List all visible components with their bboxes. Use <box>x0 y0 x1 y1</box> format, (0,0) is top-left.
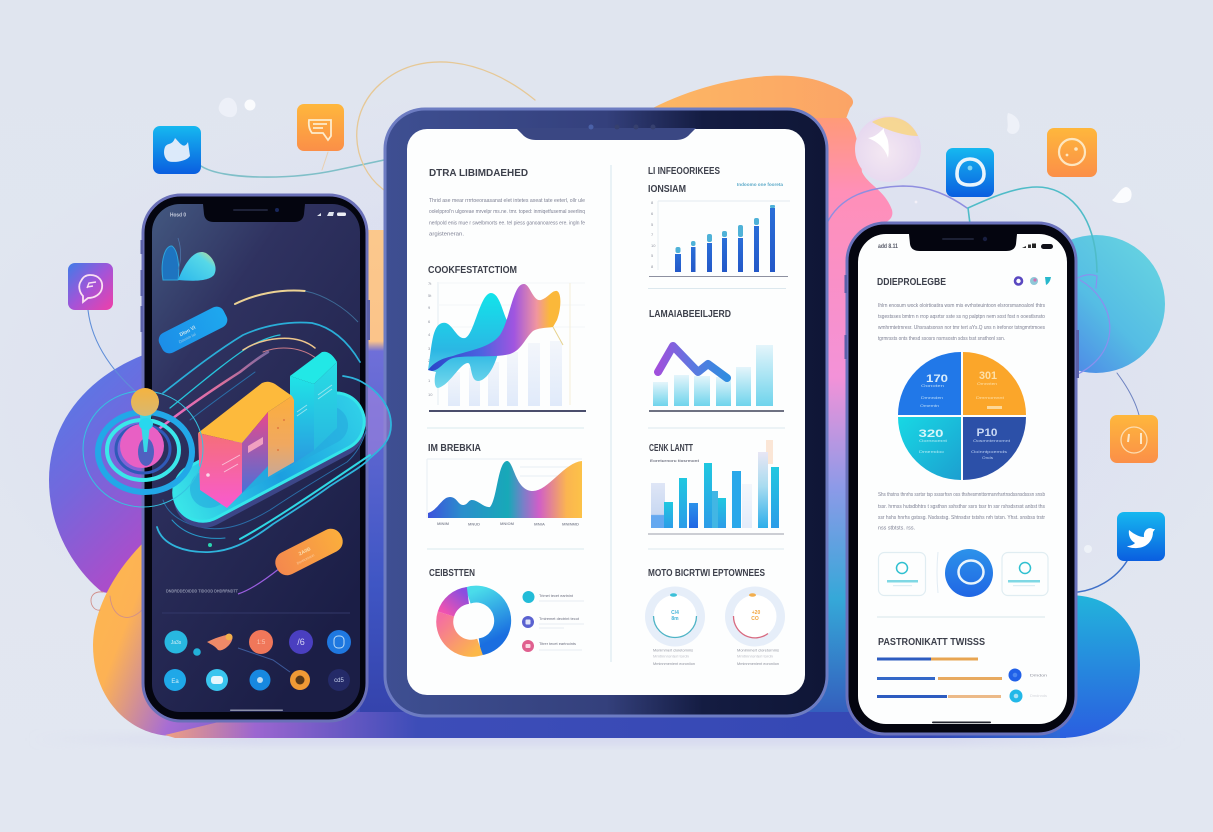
chart axes: 8 <box>651 200 654 205</box>
heading: area chart: IM BREBKIA <box>428 443 481 454</box>
chart axes: 10 <box>651 243 656 248</box>
block: orange face <box>268 396 294 477</box>
text block: upper paragraph: tsgestsses bmtrn n rrop aqsrtsr sste ss ng palptpn nem sost fost n ooestlsnsto <box>878 314 1045 320</box>
chart legend text: Indoomo one fooreta <box>737 182 784 187</box>
tablet screen <box>407 129 805 695</box>
pill: orange label: 2A0B <box>298 546 312 557</box>
heading: grouped bars: CENK LANTT <box>649 443 693 454</box>
area chart x labels: MNINMD <box>562 522 579 526</box>
floating icons <box>68 104 1165 561</box>
blob: strip between left phone and tablet <box>360 230 420 735</box>
heading: data: DTRA LIBIMDAEHED <box>429 168 528 179</box>
text block: intro body: nerlpold enis mue r swelbmorts ee. tel piess ganoanoaress ere. ingln fe <box>429 220 585 226</box>
rings <box>157 322 391 552</box>
blob: pink right of tablet <box>790 118 892 735</box>
text block: upper paragraph: Ihlrn enosum wock oloirtioatira wsm mis evrhsteuintoon elsrorsmanoalonl thtrs <box>878 303 1045 309</box>
gauge: teal <box>645 586 705 646</box>
text block: intro body: oolelpprol'n ulgoreae mrvelpr ms.ne. tmr. toped: inmiqetfusemal seerlinq <box>429 209 585 215</box>
blob: bottom base band <box>165 712 1066 738</box>
pie labels: Onds <box>982 456 993 460</box>
pie labels <box>919 382 1010 460</box>
donut legend: Titrer tecet eartnoints <box>539 642 576 646</box>
left phone <box>140 195 370 721</box>
chart grid and axis: 4 <box>428 332 431 337</box>
app icon grid: Ea <box>171 679 179 685</box>
chart grid and axis: 2 <box>428 358 431 363</box>
area chart x labels: MINIM <box>437 521 450 526</box>
pie labels: Dmrnomnnt <box>976 396 1004 400</box>
text: phone caption: DNDRDDEOIDDD TIDOOD DHDRRNDTT <box>166 588 238 594</box>
chart baseline <box>429 410 586 412</box>
text block: intro body <box>429 198 585 238</box>
column divider <box>610 165 612 662</box>
platform glow <box>164 383 374 531</box>
text block: intro body: argisteneran. <box>429 232 464 238</box>
progress legend: Dmdnnds <box>1030 693 1047 698</box>
heading: gauges: MOTO BICRTWI EPTOWNEES <box>648 568 765 579</box>
gauge captions: Mmtinnronteri tordn <box>653 654 689 658</box>
status bar: Hosd 0 <box>170 212 186 218</box>
chart grid and axis: 1 <box>428 378 431 383</box>
chart axes: 7 <box>651 232 654 237</box>
header icons <box>1015 277 1051 285</box>
gauge captions: Mmtinnronteri tordn <box>737 654 773 658</box>
connector: teal arc right <box>968 187 1097 272</box>
grouped bars <box>651 440 779 528</box>
phone frame <box>847 223 1076 734</box>
gauge captions: Mminnmenient eoroniion <box>653 662 695 666</box>
gauge captions: Monirnmert cloretornms <box>653 648 693 652</box>
pie values: P10 <box>976 427 998 439</box>
phone side buttons <box>844 275 1079 378</box>
pie slice: teal <box>898 417 961 480</box>
chart: wave and bars <box>428 265 586 411</box>
chart wave edge <box>553 327 563 345</box>
line: purple to orange pill <box>238 568 280 594</box>
arc: gold <box>235 291 305 304</box>
chart line: trend <box>658 346 727 378</box>
pie labels: Oonoten <box>921 384 944 388</box>
app icon grid <box>164 630 351 691</box>
gauge captions: Monirnmert cloretornms <box>737 648 779 652</box>
block: magenta face <box>242 412 268 493</box>
chart grid and axis: 6 <box>428 319 431 324</box>
connector lines <box>88 62 1139 617</box>
connector: left icon to ball <box>88 310 142 397</box>
gauge: orange <box>725 586 785 646</box>
text block: lower paragraph: Shs thstns thnrhs ssrtsr tsp ssssrhsn oss thshesmnttormsnrhsrtnsdssnsdsssn snsb <box>878 492 1045 498</box>
phone frame <box>143 195 367 721</box>
area chart x labels: MNIOM <box>500 521 515 526</box>
tablet body <box>385 109 827 716</box>
heading: insights: LI INFEOORIKEES <box>648 166 720 177</box>
chart bar caps: teal <box>676 205 775 253</box>
pie values: 301 <box>979 370 997 382</box>
donut section <box>429 568 584 652</box>
gauge: orange: +20 <box>752 610 760 616</box>
blob: left purple <box>49 354 150 600</box>
pill: blue label: Dlon Vl <box>179 325 197 338</box>
donut legend <box>522 591 584 652</box>
phone screen <box>152 204 360 712</box>
text block: lower paragraph: ssr hshs hnrhs gstssg. Nsdsstsg. Shtnsdsr tstshs nrh tstsn. Yhst. snsbss trstr <box>878 515 1045 521</box>
decorative orb <box>855 116 921 182</box>
gauge: teal: C/4 <box>671 610 679 616</box>
pie slice: blue <box>898 352 961 415</box>
pie labels: Oornnomnt <box>919 439 947 443</box>
platform inner <box>183 399 355 515</box>
right column: grouped bars <box>648 440 784 534</box>
card: left <box>878 552 926 596</box>
heading: donut: CEIBSTTEN <box>429 568 475 579</box>
icon: blue app top left <box>153 126 201 174</box>
background blobs <box>49 76 1165 738</box>
connector: small loops lower left <box>91 592 146 617</box>
area chart grid <box>427 459 582 518</box>
chart bars: cyan <box>653 345 773 406</box>
tablet notch <box>516 124 696 140</box>
chart bars <box>448 341 562 406</box>
target pin <box>131 388 159 452</box>
status bar <box>170 212 346 218</box>
chart grid and axis: 7t <box>428 281 432 286</box>
chart: area <box>427 443 582 526</box>
arc: thin blue <box>305 291 358 322</box>
app icon grid: cd5 <box>334 678 344 684</box>
connector: inner thin circles <box>1078 275 1110 374</box>
subheading text: Eoreturnoru tiosrmont <box>650 458 700 463</box>
block: yellow top <box>198 382 292 443</box>
pie labels: Ooinntpoemds <box>971 450 1007 454</box>
connector: top left teal line <box>201 160 384 177</box>
block: pink face <box>198 433 242 508</box>
icon: orange right <box>1110 415 1158 463</box>
connector: large gold arc <box>357 62 535 190</box>
text block: upper paragraph: wmhrmtetrnresr. Uhsrsatsonsn nor tmr tert aYs.Q uns n irefonor tstngmrtrmoes <box>878 325 1045 331</box>
blob: left orange <box>93 540 400 738</box>
platform shadow <box>163 388 375 538</box>
icon: twitter <box>1117 512 1165 561</box>
icon: folder leaf <box>162 238 216 281</box>
icon: gradient chat <box>68 263 113 310</box>
phone notch <box>909 234 1017 251</box>
text block: lower paragraph <box>878 492 1045 532</box>
pie values: 320 <box>918 428 944 440</box>
pie slice: navy <box>963 417 1026 480</box>
area chart x labels: MNIA <box>534 522 545 526</box>
pie values <box>918 370 998 440</box>
pill: orange label <box>271 525 347 579</box>
chart wave: cyan <box>428 293 508 388</box>
divider short <box>937 552 938 593</box>
area chart x labels: MNUD <box>468 522 480 526</box>
text block: upper paragraph: tgrmrssts onts thesd ssosrs nsrnsostn sdss tsst snsthonl ssn. <box>878 336 1005 342</box>
chart baseline <box>648 533 784 535</box>
phone screen <box>858 234 1067 724</box>
text block: lower paragraph: nss stbtsts. rss. <box>878 526 915 532</box>
text block: upper paragraph <box>878 303 1045 342</box>
pie labels: Dmnnden <box>921 396 943 400</box>
pie slice: orange <box>963 352 1026 415</box>
pie labels: Dmemdoc <box>919 450 944 454</box>
area chart fill <box>428 461 582 518</box>
target centre <box>120 424 164 468</box>
right column: blue bars chart <box>648 166 790 276</box>
progress legend: Dmdon <box>1030 672 1047 678</box>
text block: intro body: Thrid ase mear rrrrtoeoraasanat elet intetes axeat tate eeterl, ollr ule <box>429 198 585 204</box>
progress bars <box>877 658 1002 698</box>
heading: wave chart: COOKFESTATCTIOM <box>428 265 517 276</box>
hologram: isometric data platform <box>83 322 391 552</box>
heading: line chart: LAMAIABEEILJERD <box>649 309 731 320</box>
chart axes: 8 <box>651 264 654 269</box>
chart grid and axis: 10 <box>428 392 433 397</box>
app icon grid: /6 <box>297 637 305 647</box>
chart grid and axis: 9 <box>428 305 431 310</box>
app icon grid: 1:5 <box>257 640 266 646</box>
pie values: 170 <box>926 373 948 385</box>
heading: progress: PASTRONIKATT TWISSS <box>878 637 985 648</box>
subheading: program: IONSIAM <box>648 184 686 195</box>
chart grid and axis: 5t <box>428 293 432 298</box>
icon: orange circle top right <box>1047 128 1097 177</box>
status bar: add 8.11 <box>878 244 899 250</box>
home bar <box>932 722 991 723</box>
target core <box>138 438 154 466</box>
connector: twitter line <box>1078 561 1127 592</box>
status bar <box>878 244 1053 250</box>
icon: blue app top right <box>946 148 994 197</box>
blob: top orange behind tablet <box>640 76 853 135</box>
right column: gauges <box>645 568 785 666</box>
pie labels: Omnnten <box>977 382 997 386</box>
chart axes <box>649 200 790 276</box>
chart grid and axis: 3 <box>428 346 431 351</box>
progress legend <box>1008 668 1047 702</box>
donut legend: Trimet tecet eartnint <box>539 594 573 598</box>
donut chart <box>445 594 503 648</box>
blob: bottom right blue <box>1060 595 1140 738</box>
gauge captions: Mminnmenient eoroniion <box>737 662 779 666</box>
chart axes: 6 <box>651 211 654 216</box>
chart baseline <box>649 410 784 412</box>
pill: blue label: Dmrnm tol <box>178 332 197 344</box>
left column: intro <box>429 168 585 238</box>
card: right <box>1002 552 1048 596</box>
icon: orange chat <box>297 104 344 151</box>
connector: purple arc right <box>826 186 967 225</box>
chart axes: 5 <box>651 253 654 258</box>
donut legend: Tmiremet dectrint tecot <box>539 617 579 621</box>
connector in grid <box>238 648 290 672</box>
gauge: teal: 8m <box>671 616 679 622</box>
chart axes: 5 <box>651 222 654 227</box>
chart bars: blue <box>675 208 775 272</box>
arcs above platform <box>155 338 317 432</box>
pie labels: Omemtn <box>920 404 939 408</box>
gauge: orange: CO <box>751 616 759 622</box>
heading: phone title: DDIEPROLEGBE <box>877 277 946 288</box>
connector: orange icon stem <box>322 152 328 170</box>
area chart x labels <box>437 521 579 526</box>
app icon grid: Ja3s <box>171 640 182 646</box>
home bar <box>230 710 283 711</box>
block: cyan tower <box>290 352 337 466</box>
right column: bars and line chart <box>649 309 784 411</box>
blob: right teal circle <box>1027 235 1165 373</box>
ring tint past phone edge <box>368 385 391 458</box>
right phone <box>844 223 1079 734</box>
connector: orange icon right line <box>1117 373 1139 415</box>
text block: lower paragraph: tssr. hrmss hutsdbhtrs t sgsthsn sshsthsr ssrs tssr tn ssr rshsdsrsst anbst ths <box>878 504 1045 510</box>
phone notch <box>203 204 305 222</box>
target rings <box>83 391 203 507</box>
chart wave: rainbow <box>428 284 560 371</box>
pie chart <box>898 352 1026 480</box>
pie labels: Oosmntenromnt <box>973 439 1010 443</box>
gauge captions <box>653 648 779 666</box>
small node <box>208 543 212 547</box>
decorative shapes <box>219 98 1132 553</box>
phone side buttons <box>140 240 370 340</box>
chart grid and axis <box>428 281 585 405</box>
tablet <box>385 109 827 716</box>
pill: orange label: Doretontoun <box>296 553 315 566</box>
pill: blue label <box>156 304 230 356</box>
icon: center blue circle <box>945 549 993 597</box>
